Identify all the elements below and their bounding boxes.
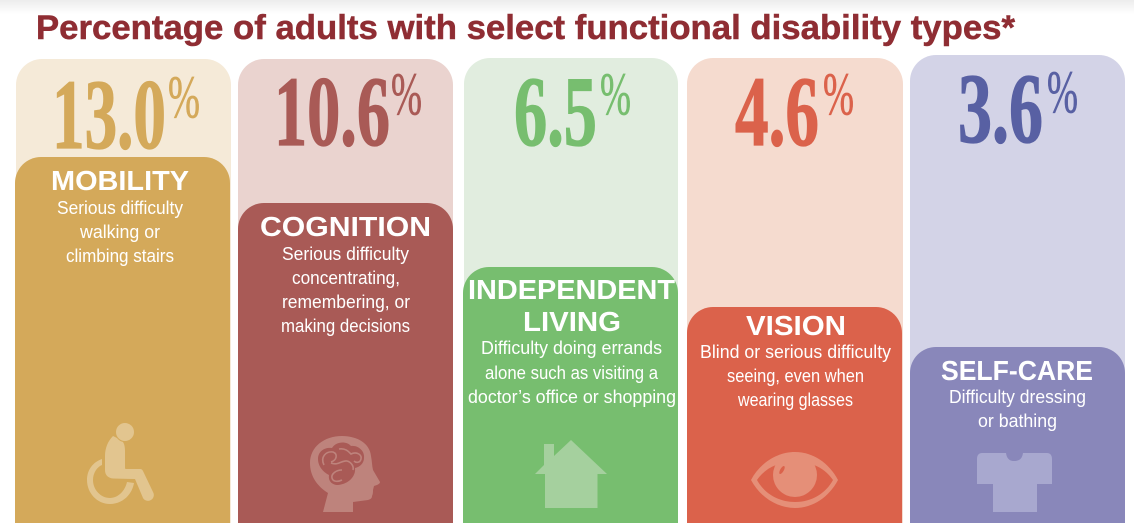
description: mobility: climbing stairs [66,246,174,266]
value: 13.0%: % [168,64,200,130]
heading: independent living [468,274,675,337]
description: self-care [949,387,1086,431]
card: mobility [15,157,230,523]
title: Percentage of adults with select functional disability types* [36,9,1016,47]
panel: cognition [238,56,453,523]
description: cognition: remembering, or [282,292,410,312]
value: 10.6%: 10.6 [274,56,390,167]
heading: cognition: COGNITION [260,211,431,242]
card: cognition [238,203,453,523]
card: vision [687,307,902,523]
value: 3.6%: 3.6 [958,53,1043,164]
card: independent living [463,267,678,523]
description: independent living: alone such as visiting a [485,363,659,383]
description: cognition: Serious difficulty [282,244,409,264]
card: self-care [910,347,1125,523]
description: vision [700,342,891,410]
description: cognition [281,244,410,336]
description: self-care: or bathing [978,411,1057,431]
heading: vision: VISION [746,310,846,341]
heading: self-care: SELF-CARE [941,355,1093,386]
heading: independent living: INDEPENDENT [468,274,675,305]
description: mobility: Serious difficulty [57,198,183,218]
value: 4.6%: 4.6 [735,56,819,167]
description: cognition: making decisions [281,316,410,336]
description: cognition: concentrating, [292,268,400,288]
value: 6.5%: 6.5 [514,56,597,167]
panel: mobility [15,59,231,523]
panel: self-care [910,53,1125,523]
value: 4.6%: % [823,61,854,127]
icon: head with brain [310,436,380,512]
description: vision: seeing, even when [727,366,864,386]
value: 10.6%: % [391,61,422,127]
value: 13.0%: 13.0 [52,59,166,170]
description: mobility [57,198,183,266]
description: mobility: walking or [79,222,160,242]
icon: house [535,440,607,508]
icon: t-shirt [977,453,1052,512]
icon: wheelchair [87,422,154,504]
description: vision: wearing glasses [737,390,853,410]
panel: vision [687,56,903,523]
heading: independent living: LIVING [523,306,621,337]
description: self-care: Difficulty dressing [949,387,1086,407]
description: independent living: doctor’s office or shopping [468,387,676,407]
description: independent living: Difficulty doing errands [481,338,662,358]
value: 6.5%: % [600,61,631,127]
heading: mobility: MOBILITY [51,165,189,196]
icon: eye [751,452,838,508]
panel: independent living [463,56,678,523]
value: 3.6%: % [1047,59,1078,125]
description: independent living [468,338,676,407]
description: vision: Blind or serious difficulty [700,342,891,362]
